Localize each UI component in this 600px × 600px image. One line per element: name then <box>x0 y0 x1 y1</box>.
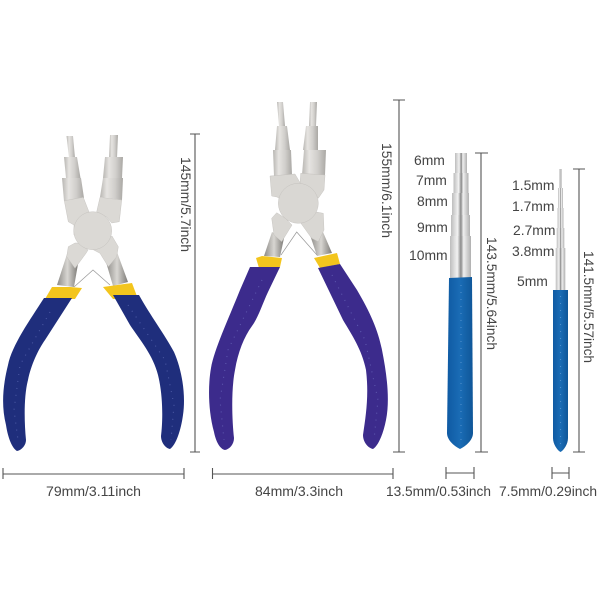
width dimension: 79mm: 79mm/3.11inch <box>46 483 141 499</box>
stepped mandrel: 1.5mm to 5mm <box>553 169 568 452</box>
mandrel size labels: 2.7mm <box>513 222 555 238</box>
height dimension: 141.5mm: 141.5mm/5.57inch <box>581 251 597 363</box>
handle speckle <box>560 296 562 445</box>
height dimension: 141.5mm <box>573 169 597 452</box>
width dimension: 79mm <box>3 468 184 499</box>
steps <box>450 153 471 278</box>
height dimension: 145mm: 145mm/5.7inch <box>178 157 194 252</box>
handle speckle <box>220 275 378 440</box>
mandrel size labels: 8mm <box>417 193 448 209</box>
metal joint <box>64 197 122 268</box>
width dimension: 84mm <box>212 468 393 499</box>
navy handles <box>3 295 184 451</box>
jaw tips <box>62 135 123 201</box>
blue handle <box>553 290 568 452</box>
necks and spring <box>264 232 332 257</box>
width dimension: 84mm: 84mm/3.3inch <box>255 483 343 499</box>
yellow bands <box>256 253 340 268</box>
width dimension: 7.5mm <box>499 467 597 499</box>
yellow bands <box>45 283 138 299</box>
purple handles <box>209 264 388 450</box>
pliers: purple handle 155mm <box>209 102 388 450</box>
height dimension: 155mm: 155mm/6.1inch <box>379 143 395 238</box>
stepped mandrel: 6mm to 10mm <box>447 153 473 449</box>
mandrel size labels: 1.5mm <box>512 177 554 193</box>
metal joint <box>270 173 325 242</box>
blue handle <box>447 277 473 449</box>
width dimension: 13.5mm <box>386 467 491 499</box>
pliers: blue handle 145mm <box>3 135 184 451</box>
height dimension: 155mm <box>379 100 405 452</box>
mandrel size labels: 3.8mm <box>512 243 554 259</box>
mandrel size labels <box>409 152 555 289</box>
mandrel size labels: 10mm <box>409 247 448 263</box>
width dimension: 13.5mm: 13.5mm/0.53inch <box>386 483 491 499</box>
mandrel size labels: 7mm <box>416 172 447 188</box>
jaw tips <box>273 102 326 176</box>
width dimension: 7.5mm: 7.5mm/0.29inch <box>499 483 597 499</box>
mandrel size labels: 5mm <box>517 273 548 289</box>
mandrel size labels: 9mm <box>417 219 448 235</box>
height dimension: 143.5mm: 143.5mm/5.64inch <box>484 237 500 350</box>
handle speckle <box>14 305 174 440</box>
handle speckle <box>460 285 462 440</box>
mandrel size labels: 1.7mm <box>512 198 554 214</box>
necks and spring <box>57 252 128 287</box>
height dimension: 143.5mm <box>475 153 500 452</box>
mandrel size labels: 6mm <box>414 152 445 168</box>
height dimension: 145mm <box>178 134 200 452</box>
steps <box>556 169 565 290</box>
